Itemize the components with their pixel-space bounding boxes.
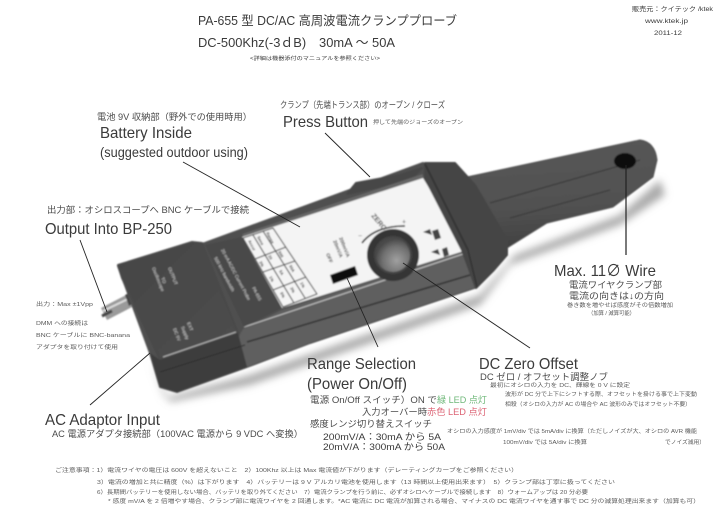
- spec table: Sens: [256, 235, 265, 247]
- callout: DC zero offset: 相殺（オシロの入力が AC の場合や AC 波形のみではオフセット不要）: [505, 400, 691, 408]
- device labels: 20 mA AC/DC Current Probe: [220, 248, 252, 301]
- callout: range selection: 200mV/A：30mA から 5A: [323, 432, 442, 443]
- note: output level and DMM: BNC ケーブルに BNC-banana: [36, 331, 131, 339]
- callout: max wire: 巻き数を増やせば感度がその倍数増加: [567, 301, 673, 309]
- device labels: 500 kHz bandwidth: [213, 256, 236, 293]
- callout: battery: [97, 111, 252, 160]
- top rim: [243, 176, 423, 236]
- note: sensitivity conversion: 100mV/div では 5A/div に換算: [503, 438, 588, 446]
- note: output level and DMM: [36, 300, 131, 351]
- spec table: 50A: [288, 264, 296, 273]
- spec table: Accur: [247, 239, 257, 252]
- callout: press button: Press Button: [283, 114, 368, 131]
- callout: max wire: （加算 / 減算可能）: [588, 309, 635, 317]
- title: <詳細は機器添付のマニュアルを参照ください>: [250, 55, 380, 62]
- lower band: [238, 250, 490, 367]
- callout: range selection: 入力オーバー時: [362, 406, 427, 417]
- spec table: 5%: [279, 291, 286, 299]
- callout: max wire: Max. 11∅ Wire: [554, 263, 656, 280]
- callout: DC zero offset: [479, 356, 698, 408]
- LED markers: [423, 229, 449, 257]
- footer notes: ご注意事項：1）電流ワイヤの電圧は 600V を超えないこと 2）100Khz 以上は Max 電流値が下がります（デレーティングカーブをご参照ください）: [55, 466, 518, 474]
- cap labels: OUTPUT: [167, 267, 179, 286]
- cap labels: Oscilloscope: [151, 267, 165, 292]
- callout: range selection: 感度レンジ切り替えスイッチ: [310, 418, 432, 429]
- callout: range selection: Range Selection: [307, 356, 416, 373]
- callout: DC zero offset: 波形が DC 分で上下にシフトする際、オフセットを掛ける事で上下変動: [505, 390, 698, 398]
- callout: max wire: [554, 263, 673, 317]
- end cap: [118, 242, 238, 360]
- spec table: Range: [265, 231, 276, 245]
- note: sensitivity conversion: でノイズ減用）: [665, 438, 705, 446]
- title: [198, 13, 457, 62]
- callout: DC zero offset: DC Zero Offset: [479, 356, 579, 373]
- callout: max wire: 電流の向きは↓の方向: [569, 290, 664, 301]
- range switch: 20mV/A: [331, 240, 344, 259]
- white panel: [242, 178, 467, 308]
- wire hole: [614, 153, 636, 169]
- dark label section: [205, 237, 282, 327]
- vendor info: [632, 4, 714, 37]
- vendor info: www.ktek.jp: [644, 18, 688, 25]
- device labels: [213, 248, 263, 302]
- spec table: 1%: [299, 281, 306, 289]
- footer notes: 6）長期間バッテリーを使用しない場合、バッテリを取り外てください 7）電流クランプを行う前に、必ずオシロへケーブルで接続します 8）ウォームアップは 20 分必要: [97, 488, 589, 496]
- callout: range selection: 20mV/A：300mA から 50A: [323, 442, 446, 453]
- callout: press button: クランプ（先端トランス部）のオープン / クローズ: [280, 99, 445, 110]
- leader lines: [80, 133, 626, 405]
- callout: range selection: 電源 On/Off スイッチ）ON で: [310, 395, 437, 405]
- footer notes: * 感度 mV/A を 2 倍増やす場合、クランプ部に電流ワイヤを 2 回通します。*AC 電流に DC 電流が加算される場合、マイナスの DC 電流ワイヤを通す事で DC 分の減算処理出来ます（加算も可）: [108, 497, 700, 505]
- callout: AC adaptor: AC 電源アダプタ接続部（100VAC 電源から 9 VDC へ変換）: [52, 428, 303, 439]
- zero dial: −: [358, 233, 362, 240]
- callout: range selection: 緑 LED 点灯: [437, 394, 487, 405]
- title: PA-655 型 DC/AC 高周波電流クランププローブ: [198, 13, 457, 28]
- zero dial: [358, 213, 419, 281]
- zero dial: ZERO: [369, 213, 388, 233]
- title: DC-500Khz(-3ｄB) 30mA ～ 50A: [198, 35, 395, 50]
- callout: battery: Battery Inside: [100, 125, 192, 142]
- callout: battery: 電池 9V 収納部（野外での使用時用）: [97, 111, 252, 122]
- note: sensitivity conversion: オシロの入力感度が 1mV/div では 5mA/div に換算（ただしノイズが大、オシロの AVR 機能: [447, 427, 698, 435]
- clamp probe photo: [101, 140, 665, 402]
- range switch: OFF: [324, 253, 333, 264]
- range switch: 200mV/A: [337, 237, 351, 259]
- note: output level and DMM: DMM への接続は: [36, 319, 89, 327]
- spec table: 1%: [268, 275, 275, 283]
- callout: max wire: 電流ワイヤクランプ部: [569, 279, 662, 290]
- range switch: [324, 237, 358, 284]
- callout: AC adaptor: AC Adaptor Input: [45, 412, 161, 429]
- jaw: [467, 140, 657, 255]
- cap labels: Supply: [180, 326, 190, 341]
- vendor info: 2011-12: [654, 30, 682, 37]
- note: sensitivity conversion: [447, 427, 705, 446]
- footer notes: 3）電流の増加と共に精度（%）は下がります 4）バッテリーは 9 V アルカリ電池を使用します（13 時間以上使用出来ます） 5）クランプ部は丁寧に扱ってください: [97, 478, 616, 486]
- cap labels: DC 9V: [172, 328, 182, 342]
- callout: DC zero offset: 最初にオシロの入力を DC、輝線を 0 V に設定: [490, 381, 631, 389]
- spec table: 20: [267, 254, 274, 261]
- callout: AC adaptor: [45, 412, 303, 439]
- spec table: [243, 228, 317, 307]
- probe body: [118, 163, 490, 392]
- cap labels: TO: [160, 277, 167, 285]
- callout: output: Output Into BP-250: [45, 221, 172, 238]
- device labels: PA-655: [251, 286, 263, 302]
- cap labels: [151, 267, 194, 342]
- vendor info: 販売元：クイテック /ktek: [632, 4, 714, 13]
- BNC connector: [101, 292, 135, 320]
- callout: output: 出力部：オシロスコープへ BNC ケーブルで接続: [47, 204, 249, 215]
- callout: battery: (suggested outdoor using): [100, 145, 248, 160]
- note: output level and DMM: アダプタを取り付けて使用: [36, 343, 118, 351]
- callout: output: [45, 204, 249, 238]
- spec table: 3%: [289, 286, 296, 294]
- footer notes: [55, 466, 700, 505]
- drop shadow: [150, 180, 665, 402]
- callout: press button: [280, 99, 464, 131]
- note: output level and DMM: 出力：Max ±1Vpp: [36, 300, 93, 308]
- collar: [425, 163, 507, 288]
- callout: range selection: [307, 356, 487, 453]
- spec table: 3%: [258, 260, 265, 268]
- callout: range selection: 赤色 LED 点灯: [427, 406, 487, 417]
- spec table: 5A: [278, 269, 285, 276]
- cap labels: EXT: [186, 322, 194, 332]
- callout: DC zero offset: DC ゼロ / オフセット調整ノブ: [480, 371, 608, 382]
- callout: press button: 押して先端のジョーズのオープン: [373, 118, 464, 126]
- callout: range selection: (Power On/Off): [307, 376, 407, 393]
- zero dial: +: [402, 219, 406, 226]
- spec table: 500: [277, 250, 285, 259]
- button: [347, 168, 422, 194]
